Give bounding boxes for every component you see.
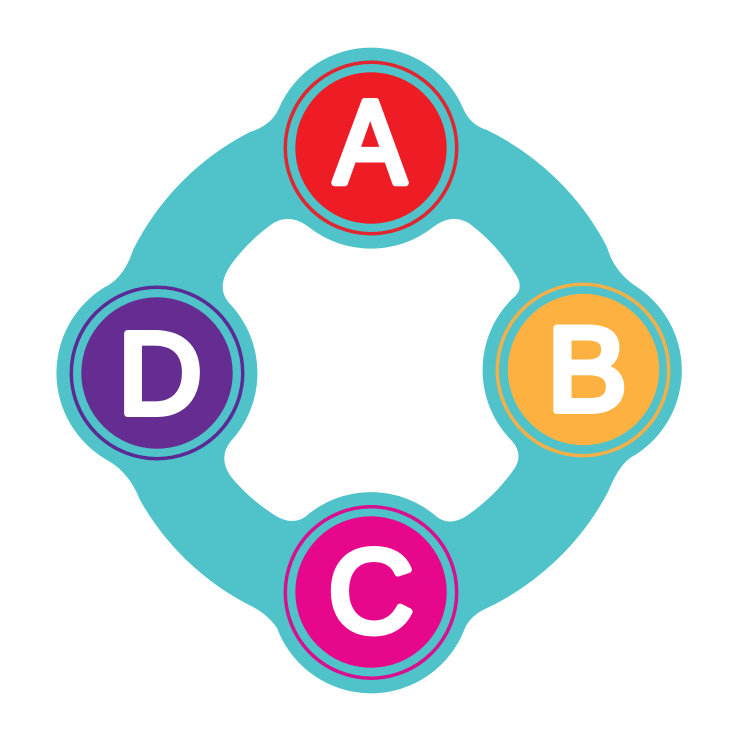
node C: [285, 507, 457, 678]
node D: [71, 287, 243, 459]
teal ring with four node lobes: [56, 48, 682, 693]
node D: D: [118, 308, 202, 438]
node A: A: [334, 76, 407, 208]
node B: B: [547, 302, 627, 436]
node C: C: [328, 526, 414, 658]
node A: [285, 62, 457, 234]
node B: [497, 284, 669, 456]
